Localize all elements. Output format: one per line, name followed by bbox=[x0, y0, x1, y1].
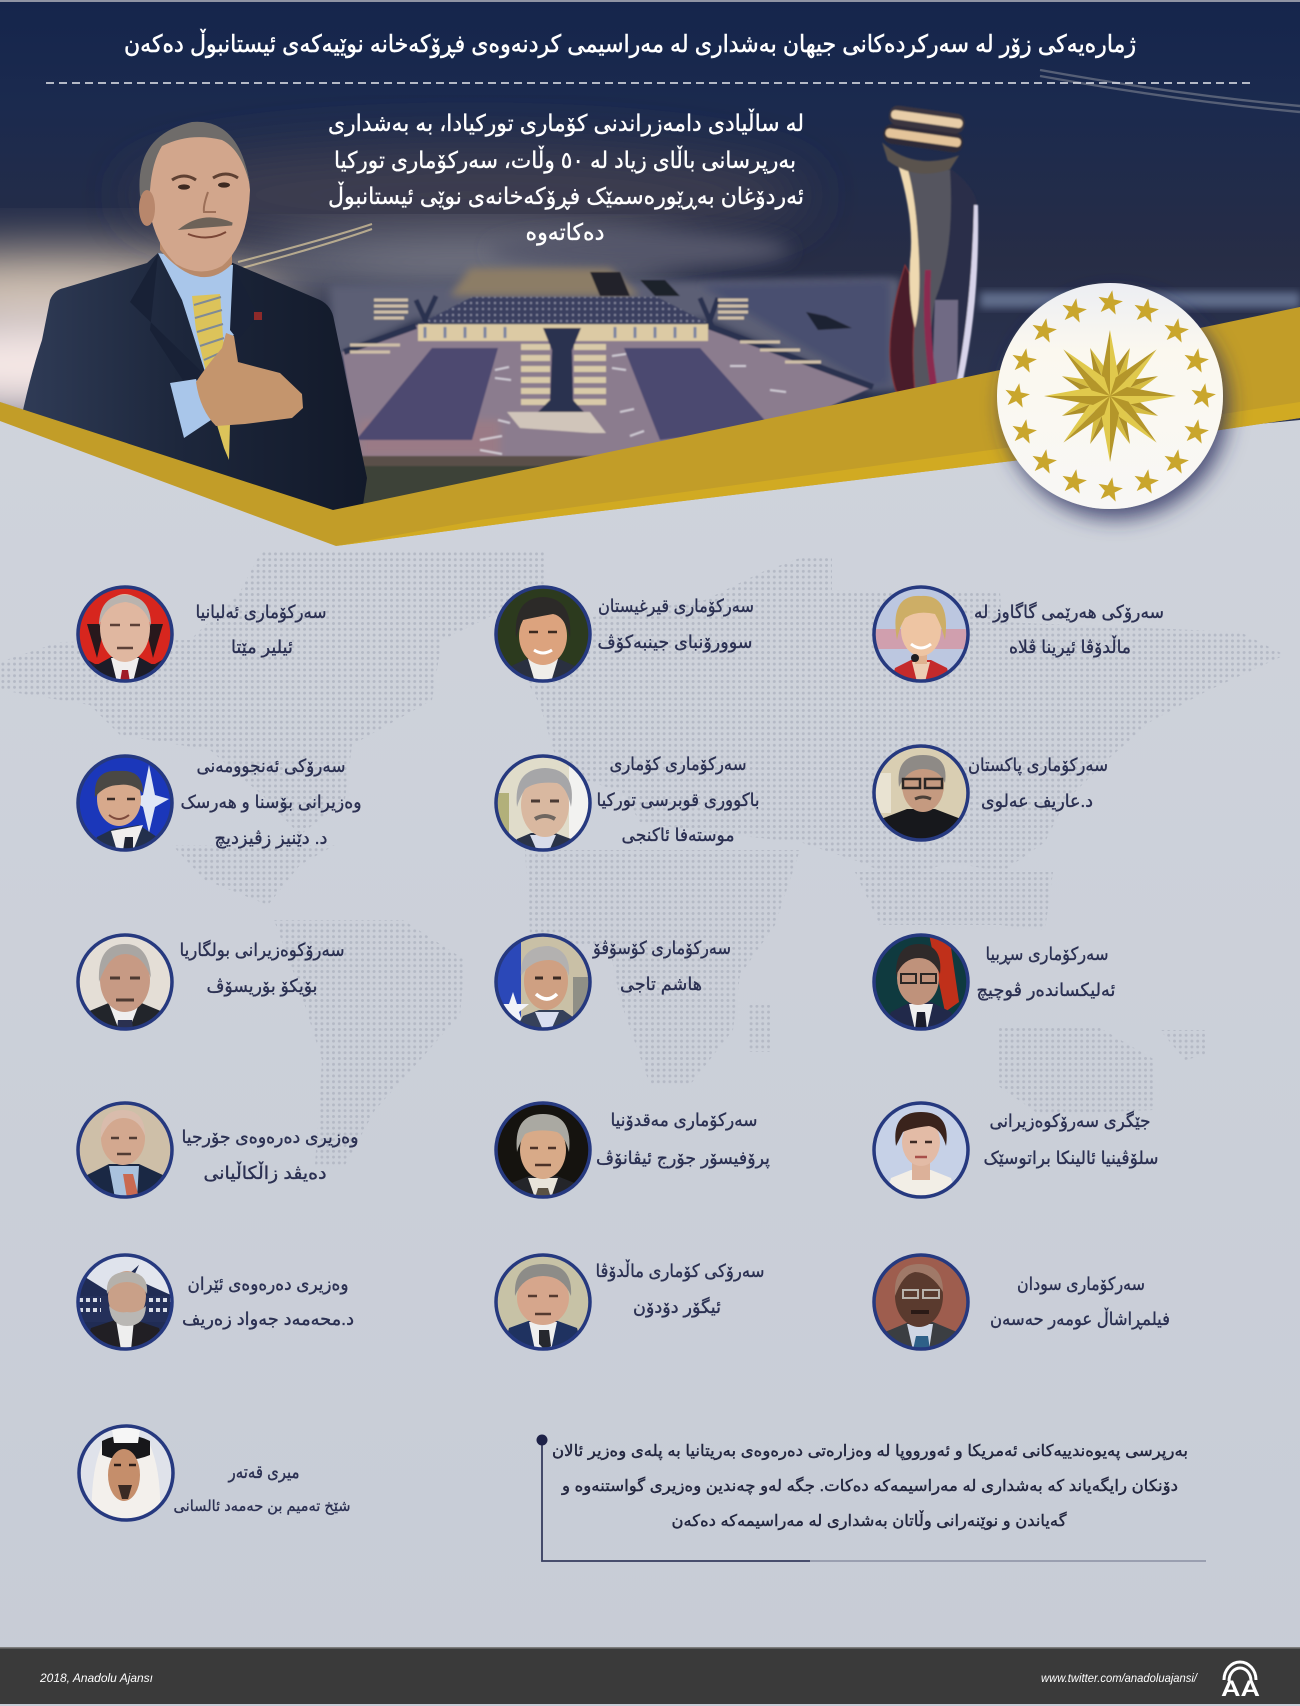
portrait bbox=[78, 1425, 174, 1521]
name: سەرۆکی هەرێمی گاگاوز لە bbox=[974, 601, 1164, 623]
name: هاشم تاجی bbox=[620, 974, 702, 995]
name: سەرکۆماری سڕبیا bbox=[986, 944, 1108, 965]
callout text: بەرپرسی پەیوەندییەکانی ئەمریکا و ئەورووپا لە وەزارەتی دەرەوەی بەریتانیا بە پلەی وەزیر ئالان bbox=[552, 1443, 1188, 1461]
name: د.عاریف عەلوی bbox=[981, 791, 1093, 812]
intro paragraph: دەکاتەوە bbox=[526, 219, 604, 246]
title: ژمارەیەکی زۆر لە سەرکردەکانی جیهان بەشداری لە مەراسیمی کردنەوەی فڕۆکەخانە نوێیەکەی ئیستانبوڵ دەکەن bbox=[124, 29, 1136, 58]
name: بۆیکۆ بۆریسۆڤ bbox=[206, 976, 318, 997]
name: وەزیرانی بۆسنا و هەرسک bbox=[180, 792, 362, 813]
name bbox=[174, 1462, 350, 1515]
face bbox=[146, 130, 250, 272]
name bbox=[974, 601, 1164, 658]
name: پرۆفیسۆر جۆرج ئیڤانۆڤ bbox=[596, 1148, 770, 1169]
name: سەرکۆماری کۆماری bbox=[610, 754, 746, 775]
callout text: گەیاندن و نوێنەرانی وڵاتان بەشداری لە مەراسیمەکە دەکەن bbox=[672, 1510, 1067, 1531]
portrait bbox=[495, 1254, 591, 1350]
name: وەزیری دەرەوەی جۆرجیا bbox=[182, 1127, 358, 1148]
lapels bbox=[130, 254, 258, 400]
person: Northern Cyprus bbox=[495, 754, 760, 851]
logo: Anadolu Agency bbox=[1221, 1662, 1260, 1701]
callout text bbox=[552, 1443, 1188, 1531]
person: Georgia bbox=[77, 1102, 358, 1198]
portrait bbox=[873, 1102, 969, 1198]
emblem stars bbox=[1003, 288, 1217, 502]
portrait bbox=[495, 755, 591, 851]
lapel pin bbox=[254, 312, 262, 320]
name bbox=[596, 1110, 770, 1169]
name bbox=[596, 754, 760, 846]
social link: www.twitter.com/anadoluajansi/ bbox=[1041, 1671, 1199, 1685]
portrait bbox=[495, 1102, 591, 1198]
person: Kosovo bbox=[495, 934, 731, 1030]
name: سەرکۆماری سودان bbox=[1017, 1274, 1145, 1295]
name: سەرکۆماری ئەلبانیا bbox=[196, 602, 326, 623]
person: Slovenia bbox=[873, 1102, 1158, 1198]
neck bbox=[160, 225, 232, 277]
name bbox=[182, 1274, 354, 1330]
name bbox=[196, 602, 326, 658]
hand bbox=[196, 333, 303, 426]
name: سەرۆکوەزیرانی بولگاریا bbox=[180, 939, 344, 961]
copyright: 2018, Anadolu Ajansı bbox=[39, 1671, 153, 1685]
name bbox=[968, 755, 1108, 812]
emblem sun bbox=[1044, 330, 1176, 462]
name: وەزیری دەرەوەی ئێران bbox=[188, 1274, 348, 1295]
person: Moldova bbox=[495, 1254, 764, 1350]
name: سەرکۆماری قیرغیستان bbox=[598, 596, 754, 617]
callout: other attendees bbox=[536, 1434, 1206, 1561]
name: شێخ تەمیم بن حەمەد ئالسانی bbox=[174, 1498, 350, 1515]
name bbox=[990, 1274, 1170, 1330]
intro paragraph: لە ساڵیادی دامەزراندنی کۆماری تورکیادا، بە بەشداری bbox=[328, 108, 804, 137]
person: Sudan bbox=[873, 1254, 1170, 1350]
hair bbox=[139, 122, 250, 205]
name bbox=[182, 1127, 358, 1183]
portrait bbox=[873, 745, 969, 841]
logo: Anadolu Agency: AA bbox=[1221, 1676, 1260, 1701]
name: سلۆڤینیا ئالینکا براتوسێک bbox=[984, 1148, 1158, 1169]
name: ئەلیکساندەر ڤوچیچ bbox=[976, 980, 1116, 1001]
hero photo: sky and airport bbox=[0, 2, 1300, 522]
name: دەیڤد زاڵکاڵیانی bbox=[204, 1161, 326, 1183]
shirt bbox=[158, 253, 236, 372]
callout frame bbox=[536, 1434, 1206, 1561]
top edge bbox=[0, 0, 1300, 2]
name bbox=[180, 756, 362, 849]
name: سەرۆکی ئەنجوومەنی bbox=[196, 756, 346, 777]
name bbox=[598, 596, 754, 653]
portrait bbox=[873, 1254, 969, 1350]
portrait bbox=[77, 586, 173, 682]
tie bbox=[192, 294, 230, 460]
portrait bbox=[77, 755, 173, 851]
portrait bbox=[77, 1254, 173, 1350]
apron bbox=[342, 325, 873, 457]
person: Qatar bbox=[78, 1425, 350, 1521]
portrait bbox=[495, 586, 591, 682]
name: باکووری قوبرسی تورکیا bbox=[596, 790, 760, 811]
intro paragraph bbox=[328, 108, 804, 246]
name: سەرۆکی کۆماری ماڵدۆڤا bbox=[596, 1259, 764, 1282]
name: فیلمڕاشاڵ عومەر حەسەن bbox=[990, 1307, 1170, 1330]
person: Kyrgyzstan bbox=[495, 586, 754, 682]
sky bbox=[0, 2, 1300, 424]
airport foreground bbox=[362, 456, 592, 466]
concourses bbox=[344, 296, 873, 387]
name: ئیلیر مێتا bbox=[231, 637, 293, 658]
person: Pakistan bbox=[873, 745, 1108, 841]
name bbox=[180, 939, 344, 997]
suit bbox=[23, 253, 367, 512]
name: ئیگۆر دۆدۆن bbox=[633, 1296, 721, 1318]
person: Bosnia bbox=[77, 755, 362, 851]
name: سەرکۆماری پاکستان bbox=[968, 755, 1108, 776]
outer grounds bbox=[330, 268, 900, 390]
name: د.محەمەد جەواد زەریف bbox=[182, 1309, 354, 1330]
name bbox=[984, 1110, 1158, 1169]
control tower bbox=[879, 104, 978, 394]
name: سوورۆنبای جینبەکۆڤ bbox=[598, 632, 752, 653]
dotted world map bbox=[0, 550, 1285, 1165]
name: سەرکۆماری مەقدۆنیا bbox=[610, 1110, 758, 1131]
shirt cuff bbox=[170, 379, 211, 438]
name: سەرکۆماری کۆسۆڤۆ bbox=[592, 938, 731, 959]
runways bbox=[356, 348, 498, 440]
name: د. دێنیز زڤیزدیچ bbox=[214, 828, 328, 849]
footer bar bbox=[0, 1647, 1300, 1704]
portrait bbox=[77, 934, 173, 1030]
name: موستەفا ئاکنجی bbox=[622, 825, 734, 846]
portrait bbox=[873, 586, 969, 682]
terminal bbox=[418, 324, 708, 341]
facial features bbox=[172, 174, 238, 238]
person: Bulgaria bbox=[77, 934, 344, 1030]
portrait bbox=[873, 934, 969, 1030]
portrait bbox=[495, 934, 591, 1030]
airport bbox=[330, 268, 900, 512]
name bbox=[596, 1259, 764, 1318]
name: میری قەتەر bbox=[228, 1462, 300, 1483]
name bbox=[592, 938, 731, 995]
person: Macedonia bbox=[495, 1102, 770, 1198]
central pier bbox=[507, 328, 606, 433]
name: جێگری سەرۆکوەزیرانی bbox=[990, 1110, 1150, 1132]
person: Gagauzia bbox=[873, 586, 1164, 682]
gold ribbon bbox=[0, 307, 1300, 546]
person: Iran bbox=[77, 1254, 354, 1350]
intro paragraph: ئەردۆغان بەڕێورەسمێک فڕۆکەخانەی نوێی ئیستانبوڵ bbox=[328, 182, 804, 210]
portrait bbox=[77, 1102, 173, 1198]
person: Albania bbox=[77, 586, 326, 682]
ear bbox=[139, 190, 155, 226]
emblem: presidential seal bbox=[997, 283, 1223, 509]
person: Serbia bbox=[873, 934, 1116, 1030]
intro paragraph: بەرپرسانی باڵای زیاد لە ٥٠ وڵات، سەرکۆماری تورکیا bbox=[334, 145, 796, 174]
parked planes bbox=[480, 354, 786, 454]
name: ماڵدۆڤا ئیرینا ڤلاه bbox=[1009, 635, 1131, 658]
portrait: president bbox=[23, 122, 367, 512]
roof bbox=[421, 297, 708, 323]
name bbox=[976, 944, 1116, 1001]
callout text: دۆنکان رایگەیاند کە بەشداری لە مەراسیمەکە دەکات. جگە لەو چەندین وەزیری گواستنەوە و bbox=[561, 1476, 1178, 1496]
